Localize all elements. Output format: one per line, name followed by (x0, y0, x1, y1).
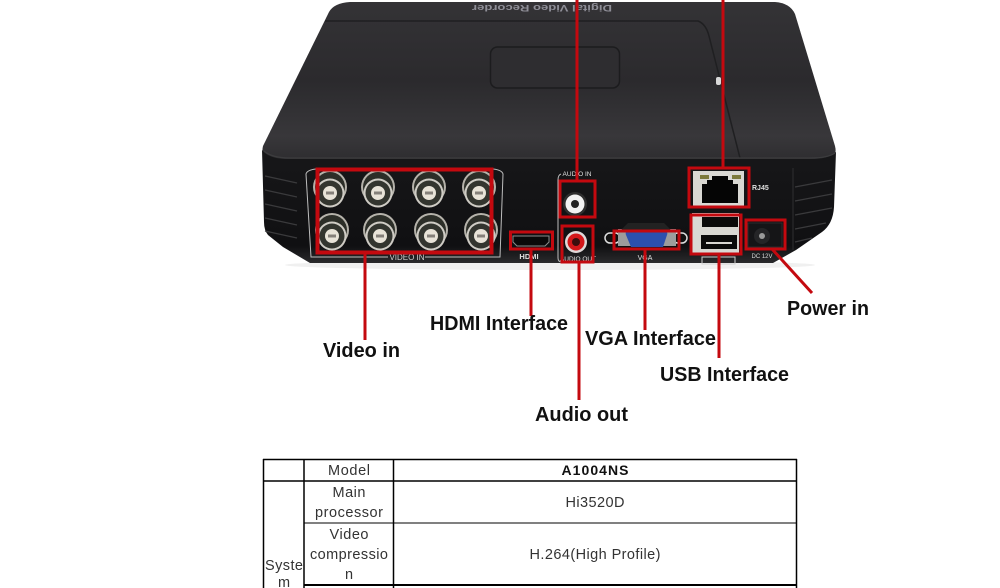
USB ports (692, 213, 739, 253)
callout: power in (746, 220, 869, 320)
HDMI port (513, 236, 549, 246)
status LED (716, 77, 721, 85)
right vent grooves (795, 180, 832, 242)
HDMI caption: HDMI (519, 252, 539, 261)
DC 12V caption: DC 12V (751, 254, 773, 260)
AUDIO IN caption: AUDIO IN (563, 171, 592, 178)
VGA caption: VGA (638, 255, 653, 262)
audio-in RCA jack (563, 192, 587, 216)
device shadow (285, 260, 815, 270)
video-in bracket (306, 169, 503, 257)
table text (265, 462, 660, 588)
front top highlight (264, 151, 835, 158)
top panel seam lines (325, 21, 740, 158)
callout: HDMI interface (430, 232, 568, 335)
brand text strip: Digital Video Recorder (471, 3, 612, 13)
table text: Model (328, 463, 370, 479)
RJ45 port (693, 171, 744, 206)
table text: Main (332, 485, 366, 501)
callout: VGA interface (585, 231, 716, 350)
RJ45 caption: RJ45 (752, 185, 769, 192)
callout: HDMI interface: HDMI Interface (430, 313, 568, 335)
callout: audio out (535, 226, 628, 426)
USB caption (702, 257, 735, 264)
callout: VGA interface: VGA Interface (585, 328, 716, 350)
table text: A1004NS (562, 462, 628, 478)
audio bracket (558, 174, 562, 262)
table text: n (345, 567, 353, 583)
table text: processor (315, 505, 383, 521)
callout: RJ45 network (689, 0, 749, 207)
callout: audio out: Audio out (535, 404, 628, 426)
DVR recorder device (262, 2, 836, 270)
callout: video in (318, 170, 492, 362)
callout: USB interface: USB Interface (660, 364, 789, 386)
callout: USB interface (660, 215, 789, 386)
table text: H.264(High Profile) (530, 547, 660, 563)
device top panel (262, 2, 836, 160)
specification table (263, 459, 797, 588)
table text: Video (330, 527, 368, 543)
table grid (263, 459, 797, 588)
callout: audio in (560, 0, 595, 217)
top recessed label window (490, 47, 620, 88)
table text: Syste (265, 558, 303, 574)
callout: power in: Power in (787, 298, 869, 320)
table text: Hi3520D (566, 495, 624, 511)
audio-out RCA jack (565, 231, 587, 253)
AUDIO OUT caption: AUDIO OUT (560, 256, 596, 263)
power jack (748, 223, 782, 247)
left vent grooves (265, 176, 297, 238)
device front panel (262, 150, 836, 263)
callout: video in: Video in (323, 340, 400, 362)
VIDEO IN caption: VIDEO IN (389, 253, 425, 262)
right vent divider (792, 168, 794, 250)
BNC connectors (313, 170, 498, 250)
table text: compressio (310, 547, 388, 563)
VGA port (605, 223, 687, 247)
